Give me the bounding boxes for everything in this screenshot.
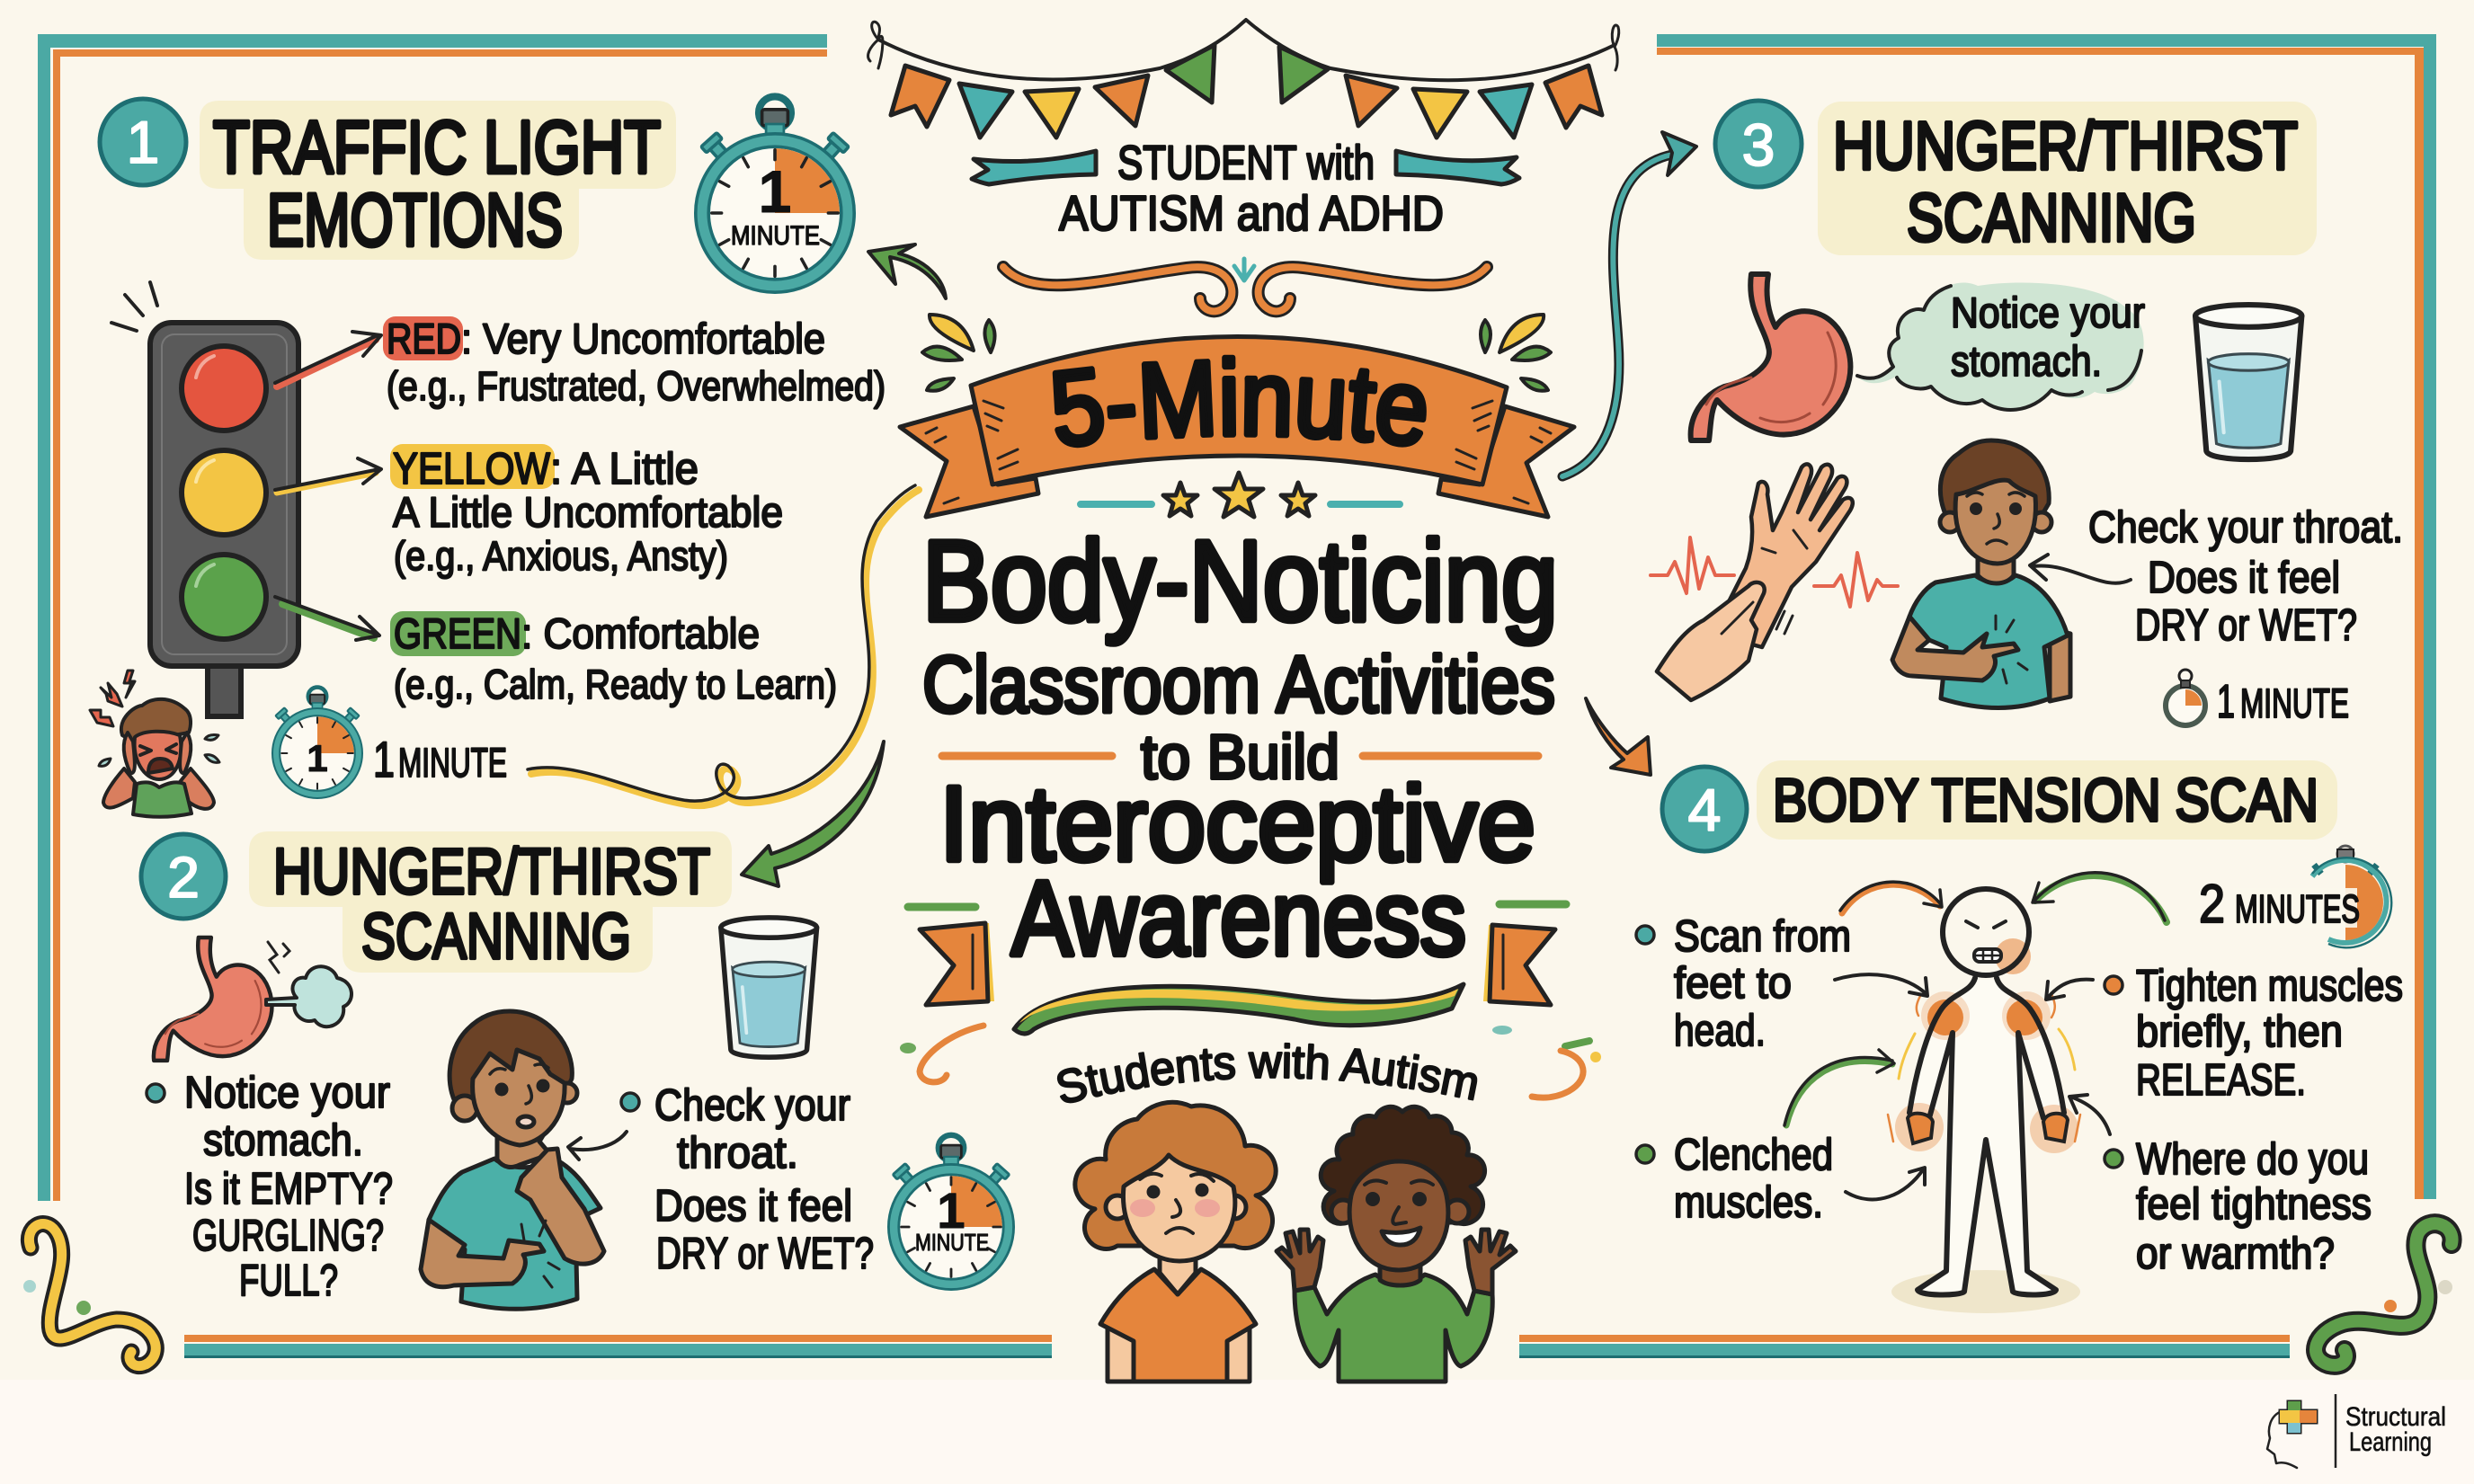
text: notice your stomach: stomach. [203, 1116, 363, 1165]
time label: MINUTES [2235, 887, 2360, 931]
text: scan from feet to head [1636, 912, 1851, 1055]
logo: Structural Learning: Structural [2345, 1402, 2446, 1432]
small decorative curls [900, 1026, 1601, 1097]
text: notice your stomach [147, 1069, 393, 1305]
stopwatch: 1 minute: MINUTE [915, 1229, 989, 1256]
number badge 3 [1715, 101, 1802, 187]
label: yellow: YELLOW [393, 445, 551, 493]
text: check your throat: Check your throat. [2088, 503, 2403, 552]
speech cloud [1857, 282, 2145, 410]
time label: MINUTE [398, 740, 507, 786]
main title: Body-Noticing [922, 517, 1558, 644]
label: green: (e.g., Calm, Ready to Learn) [394, 662, 837, 707]
icon: water glass [721, 918, 817, 1057]
stopwatch: small [272, 688, 362, 798]
corner flourish: yellow [23, 1224, 156, 1366]
illustration: boy pointing at chest [1892, 440, 2070, 708]
stopwatch: small: 1 [307, 737, 328, 779]
icon: stomach with gas [154, 937, 352, 1061]
stopwatch: 1 minute [888, 1135, 1014, 1290]
child: smiling student [1277, 1106, 1516, 1382]
time label: 1 [2217, 676, 2235, 728]
main title: to Build [1141, 722, 1339, 792]
illustration: boy touching throat and stomach [421, 1011, 604, 1309]
stopwatch: 1 minute: 1 [937, 1182, 966, 1239]
stars and dashes [1081, 473, 1400, 517]
text: check your throat: throat. [677, 1129, 798, 1177]
arrow: green [275, 597, 379, 640]
heading: SCANNING [1907, 180, 2196, 255]
ground shadow [1891, 1270, 2080, 1313]
subtitle [1059, 137, 1444, 241]
main title: Interoceptive [939, 765, 1535, 884]
heading highlight [249, 831, 732, 973]
bunting [868, 20, 1619, 138]
orange flourish [1003, 259, 1487, 311]
stopwatch: 1 minute [696, 96, 854, 292]
time label: 2 [2199, 874, 2225, 934]
heading highlight [1757, 760, 2337, 840]
arrow: to section 3 [1562, 132, 1696, 476]
panel: section 2 hunger/thirst scanning [141, 831, 1014, 1309]
subtitle ribbons [972, 151, 1519, 184]
stopwatch: 2 minutes [2233, 846, 2391, 947]
heading highlight [200, 101, 676, 260]
label: red: (e.g., Frustrated, Overwhelmed) [387, 363, 885, 409]
title side ribbons [908, 904, 1566, 1005]
number badge 1 [100, 99, 186, 185]
label: green [390, 609, 837, 707]
number badge 4: 4 [1688, 777, 1721, 843]
text: check your throat: Does it feel [2148, 554, 2340, 602]
squiggle connector [528, 485, 919, 805]
text: tighten muscles: briefly, then [2136, 1008, 2343, 1056]
label: green: : Comfortable [521, 609, 760, 657]
logo: Structural Learning [2267, 1394, 2446, 1468]
logo: Structural Learning: Learning [2349, 1427, 2432, 1457]
heading: BODY TENSION SCAN [1773, 767, 2318, 834]
text: scan from feet to head: head. [1674, 1007, 1766, 1055]
arrows around figure [1784, 873, 2167, 1199]
number badge 1: 1 [127, 109, 159, 175]
text: notice your stomach: Is it EMPTY? [184, 1165, 393, 1213]
text: notice your stomach: Notice your [184, 1069, 390, 1117]
title swoosh [1014, 984, 1464, 1034]
heading [273, 837, 710, 973]
number badge 3: 3 [1742, 111, 1775, 178]
icon: pulse lines [1651, 538, 1898, 607]
heading: HUNGER/THIRST [273, 837, 710, 908]
text: tighten muscles: RELEASE. [2136, 1056, 2306, 1105]
arrow: to section 1 [868, 244, 946, 298]
main title [922, 517, 1558, 978]
main title: Classroom Activities [922, 639, 1555, 729]
time label [2217, 676, 2349, 728]
arrow: yellow [275, 458, 381, 493]
text: where do you feel [2105, 1135, 2372, 1278]
text: check your throat: DRY or WET? [656, 1230, 874, 1278]
label: yellow: A Little Uncomfortable [393, 488, 783, 536]
curved label: Students with Autism: Students with Autism [1057, 1043, 1478, 1104]
icon: hands checking pulse [1657, 464, 1853, 700]
arrow: to section 2 [742, 742, 884, 886]
label: green: GREEN [394, 609, 521, 657]
time label [2199, 874, 2360, 934]
stopwatch: 1 minute: MINUTE [731, 221, 820, 251]
heading [213, 105, 661, 262]
label: red: RED [387, 315, 461, 362]
heading: SCANNING [361, 902, 631, 973]
label: yellow: (e.g., Anxious, Ansty) [394, 533, 728, 579]
label: yellow [390, 444, 783, 579]
text: where do you feel: Where do you [2136, 1135, 2369, 1184]
arrow: to throat [568, 1132, 627, 1160]
text: check your throat [621, 1081, 874, 1278]
text: tighten muscles: Tighten muscles [2136, 962, 2403, 1010]
number badge 2 [141, 834, 226, 919]
text: clenched muscles: Clenched [1674, 1131, 1833, 1179]
corner flourish: green [2316, 1223, 2452, 1365]
text: scan from feet to head: Scan from [1674, 912, 1851, 961]
label: red [383, 315, 885, 409]
label: yellow: : A Little [550, 445, 699, 493]
text: notice your stomach: FULL? [239, 1257, 338, 1305]
arrow: red [275, 332, 381, 387]
speech cloud: stomach. [1951, 337, 2102, 385]
text: clenched muscles: muscles. [1674, 1178, 1823, 1227]
panel: section 1 traffic light emotions [90, 96, 885, 817]
traffic light [111, 282, 298, 716]
banner: 5-Minute: 5-Minute [1052, 354, 1427, 448]
text: scan from feet to head: feet to [1674, 959, 1792, 1008]
text: check your throat: Does it feel [654, 1182, 852, 1231]
main title: Awareness [1011, 859, 1466, 978]
time label [373, 731, 507, 787]
text: check your throat [2088, 503, 2403, 650]
heading: EMOTIONS [267, 178, 563, 262]
child: sad student [1075, 1102, 1276, 1382]
icon: stressed child [90, 671, 219, 817]
arrow: to throat [2030, 555, 2131, 583]
icon: stomach [1691, 274, 1850, 440]
time label: 1 [373, 731, 395, 787]
banner drops [922, 315, 1551, 391]
number badge 2: 2 [167, 845, 200, 910]
text: clenched muscles [1636, 1131, 1833, 1227]
subtitle: AUTISM and ADHD [1059, 185, 1444, 241]
text: where do you feel: feel tightness [2136, 1180, 2372, 1229]
stopwatch: tiny [2166, 670, 2205, 725]
banner: 5-Minute [897, 334, 1577, 520]
icon: water glass [2195, 305, 2301, 459]
time label: MINUTE [2240, 680, 2349, 726]
text: where do you feel: or warmth? [2136, 1230, 2335, 1278]
panel: section 4 body tension scan [1636, 760, 2403, 1313]
number badge 4 [1662, 767, 1747, 851]
label: red: : Very Uncomfortable [461, 315, 825, 362]
panel: section 3 hunger/thirst scanning [1651, 101, 2403, 728]
text: check your throat: DRY or WET? [2135, 601, 2357, 650]
text: tighten muscles [2105, 962, 2403, 1105]
tension figure [1888, 889, 2080, 1295]
speech cloud: Notice your [1951, 289, 2145, 336]
heading [1833, 108, 2298, 255]
heading highlight [1818, 102, 2317, 255]
arrow: to section 4 [1586, 698, 1651, 775]
subtitle: STUDENT with [1117, 137, 1375, 190]
stopwatch: 1 minute: 1 [759, 158, 791, 225]
text: check your throat: Check your [654, 1081, 850, 1130]
heading: TRAFFIC LIGHT [213, 105, 661, 189]
heading: HUNGER/THIRST [1833, 108, 2298, 183]
text: notice your stomach: GURGLING? [192, 1212, 384, 1260]
